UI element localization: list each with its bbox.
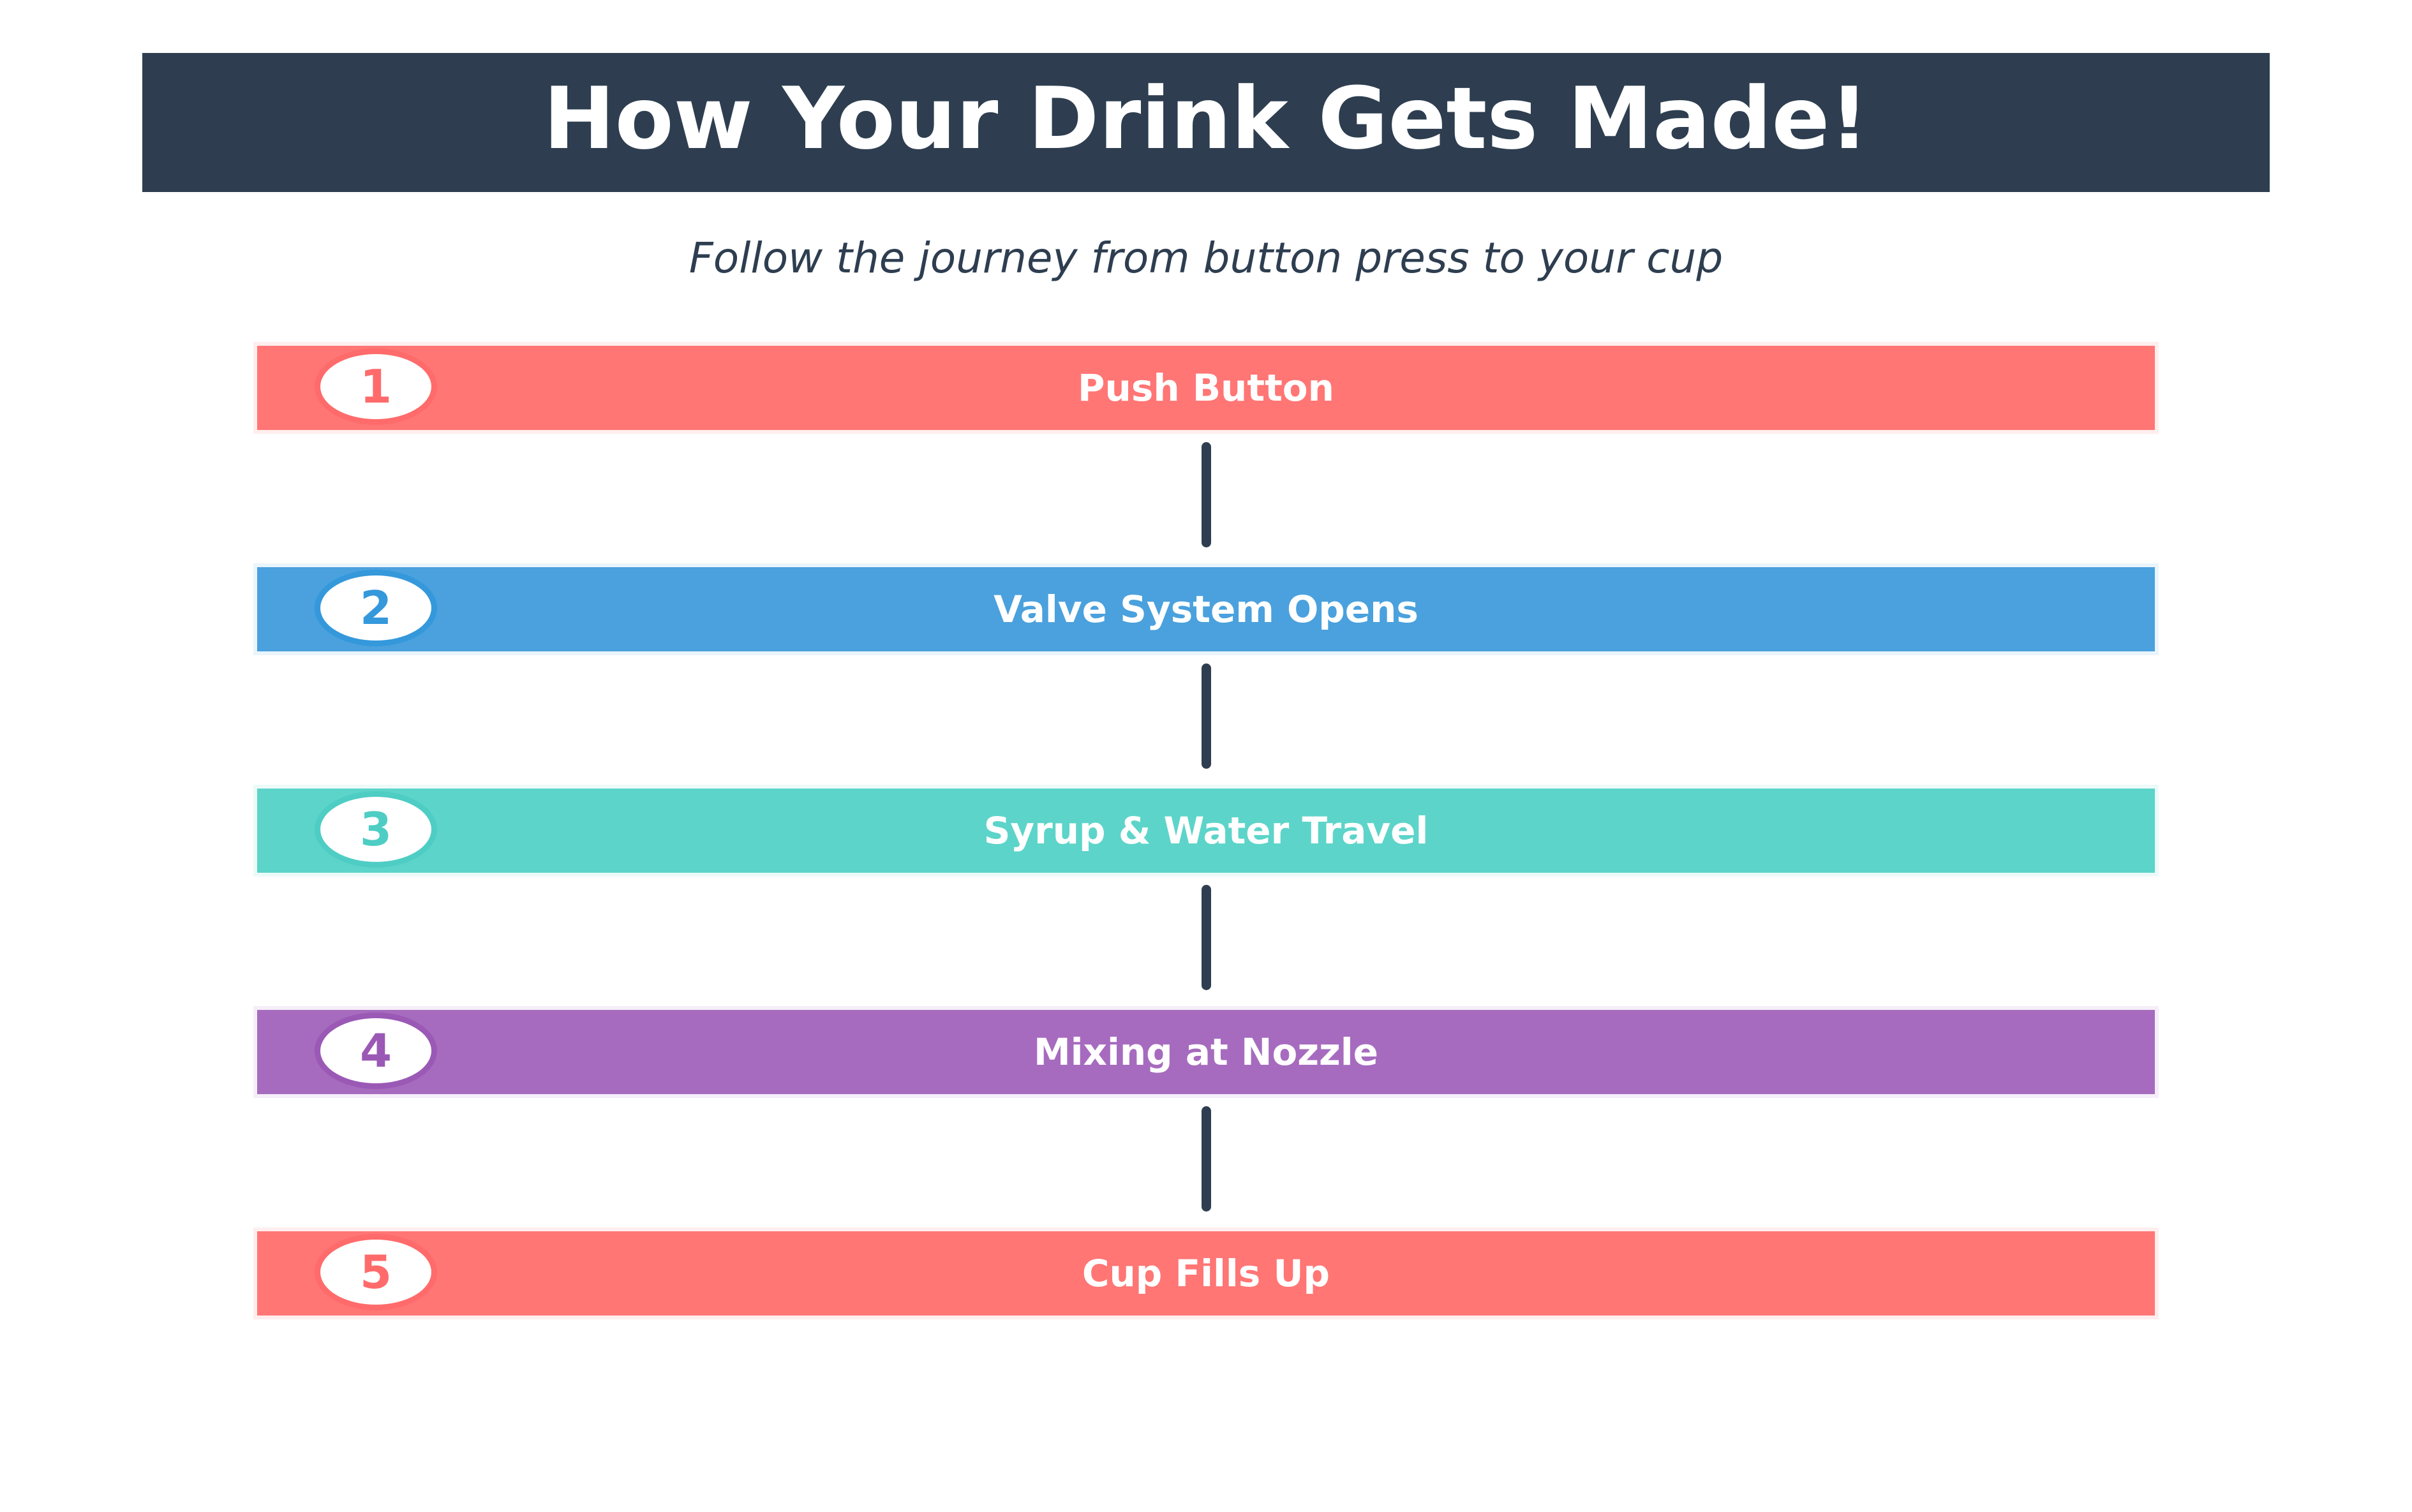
title: How Your Drink Gets Made! — [544, 69, 1868, 168]
step 2 — [253, 563, 2159, 655]
step 5: Cup Fills Up — [1082, 1252, 1330, 1295]
arrow 3 — [1202, 885, 1211, 990]
badge 5: 5 — [360, 1245, 392, 1299]
step 5 — [253, 1227, 2159, 1319]
step 1 — [253, 342, 2159, 434]
step 3 — [253, 785, 2159, 877]
step 1: Push Button — [1078, 366, 1334, 410]
badge 3: 3 — [360, 803, 392, 856]
title — [142, 53, 2270, 192]
arrow 1 — [1202, 442, 1211, 547]
badge 2: 2 — [360, 581, 392, 635]
step 4: Mixing at Nozzle — [1034, 1030, 1378, 1074]
step 3: Syrup & Water Travel — [984, 809, 1428, 852]
arrow 4 — [1202, 1106, 1211, 1212]
badge 5 — [315, 1234, 437, 1310]
badge 1 — [315, 348, 437, 425]
subtitle: Follow the journey from button press to your cup — [689, 233, 1723, 283]
badge 4: 4 — [360, 1024, 392, 1078]
badge 2 — [315, 570, 437, 646]
step 2: Valve System Opens — [994, 588, 1418, 631]
step 4 — [253, 1006, 2159, 1098]
badge 3 — [315, 791, 437, 868]
badge 4 — [315, 1012, 437, 1089]
arrow 2 — [1202, 663, 1211, 769]
badge 1: 1 — [360, 360, 392, 413]
